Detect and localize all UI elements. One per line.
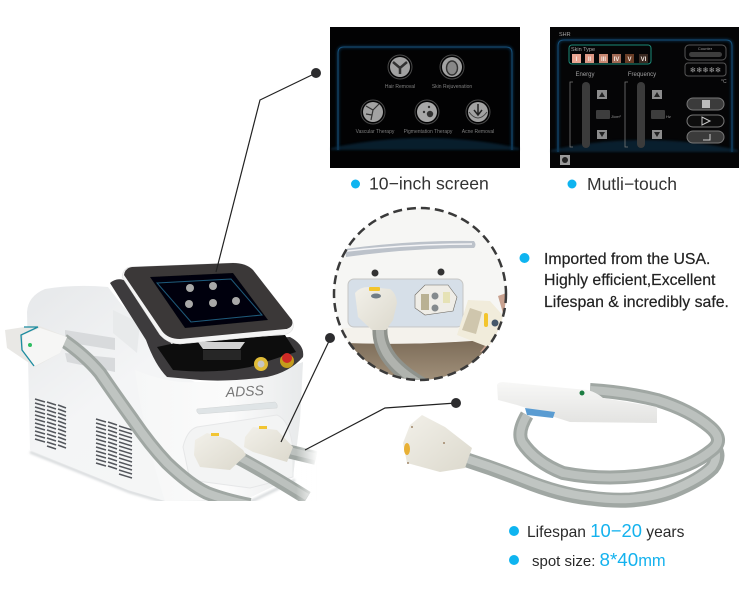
front light strip: [197, 402, 277, 414]
callout: line to screen: [216, 68, 321, 272]
rear hanging cable: [63, 340, 250, 505]
connector panel: [348, 279, 463, 327]
text: imported from the USA: Imported from the USA.: [544, 251, 710, 268]
lower cable: [467, 445, 717, 500]
energy and frequency labels: Frequency: [628, 72, 656, 78]
skin type selector: V: [627, 57, 632, 63]
energy and frequency labels: Energy: [575, 72, 595, 78]
screen labels: Skin Rejuvenation: [432, 84, 472, 90]
counter and temperature: Counter: [698, 46, 713, 51]
text: imported from the USA: Highly efficient,Excellent: [544, 272, 716, 289]
icon: hair removal: [388, 55, 412, 79]
counter and temperature: °C: [721, 79, 727, 85]
device body: [27, 286, 303, 501]
energy slider: J/cm²: [611, 114, 621, 119]
frequency slider: Hz: [666, 114, 671, 119]
floor: [348, 340, 492, 380]
caption: multi-touch: Mutli−touch: [587, 174, 677, 194]
vents right: [96, 419, 132, 478]
screen labels: Vascular Therapy: [356, 129, 395, 135]
caption: 10-inch screen: 10−inch screen: [369, 174, 489, 194]
skin type selector: IV: [614, 57, 619, 63]
screen labels: Hair Removal: [385, 84, 415, 90]
skin type selector: Skin Type: [571, 47, 595, 53]
side grille: [65, 310, 140, 372]
A and B markers: [372, 268, 444, 276]
handle plug A: [355, 287, 426, 380]
socket B: [415, 285, 457, 315]
energy slider: [570, 82, 621, 148]
brand name: ADSS: [224, 382, 265, 400]
screen labels: Acne Removal: [462, 129, 494, 135]
screen labels: [356, 84, 494, 135]
text: lifespan: Lifespan 10−20 years: [527, 520, 685, 541]
holstered handpiece: [5, 325, 67, 367]
panel: multi-touch screen UI: SHR: [559, 32, 571, 38]
skin type selector: III: [601, 57, 606, 63]
settings icon: [560, 155, 570, 165]
upper cable loop: [520, 390, 718, 478]
soft floor shadow: [30, 452, 295, 502]
icon: skin rejuvenation: [440, 55, 464, 79]
light bar: [345, 241, 476, 257]
device front body: [135, 362, 303, 501]
emergency stop and key: [254, 353, 294, 371]
frequency slider: [625, 82, 671, 148]
icon: vascular therapy: [361, 100, 385, 124]
illustration: main device: [5, 263, 318, 506]
callout: line to handpiece: [305, 398, 461, 450]
plug head: [403, 415, 472, 472]
icon: acne removal: [466, 100, 490, 124]
icon: pigmentation therapy: [415, 100, 439, 124]
vents left: [35, 399, 66, 449]
panel: connector close-up circle: [330, 205, 515, 388]
text: imported from the USA: Lifespan & incredibly safe.: [544, 294, 729, 311]
text: imported from the USA: [520, 251, 729, 311]
cable end fade: [296, 440, 318, 506]
touchscreen unit: [122, 263, 293, 344]
detached plug: [457, 294, 506, 352]
panel: 10-inch screen UI: [330, 27, 520, 168]
illustration: standalone handpiece: [403, 382, 718, 500]
buttons: save, start, back: [687, 98, 724, 143]
handle: [497, 382, 657, 423]
counter and temperature: ❄❄❄❄❄: [690, 66, 721, 74]
panel: multi-touch screen UI: [550, 27, 739, 168]
text: spot size: spot size: 8*40mm: [532, 549, 666, 570]
skin type selector: I: [576, 57, 578, 63]
skin type selector: II: [588, 57, 591, 63]
dark base deck: [110, 279, 303, 381]
bottom crop mask: [0, 501, 330, 521]
cable front: [237, 457, 307, 498]
screen labels: Pigmentation Therapy: [404, 129, 453, 135]
energy and frequency labels: [575, 72, 656, 78]
callout: line to close-up: [281, 333, 335, 442]
counter and temperature: [685, 45, 727, 85]
connector recess: [183, 415, 293, 488]
plugs: [194, 433, 246, 470]
skin type selector: VI: [641, 57, 647, 63]
skin type selector: [569, 45, 651, 64]
